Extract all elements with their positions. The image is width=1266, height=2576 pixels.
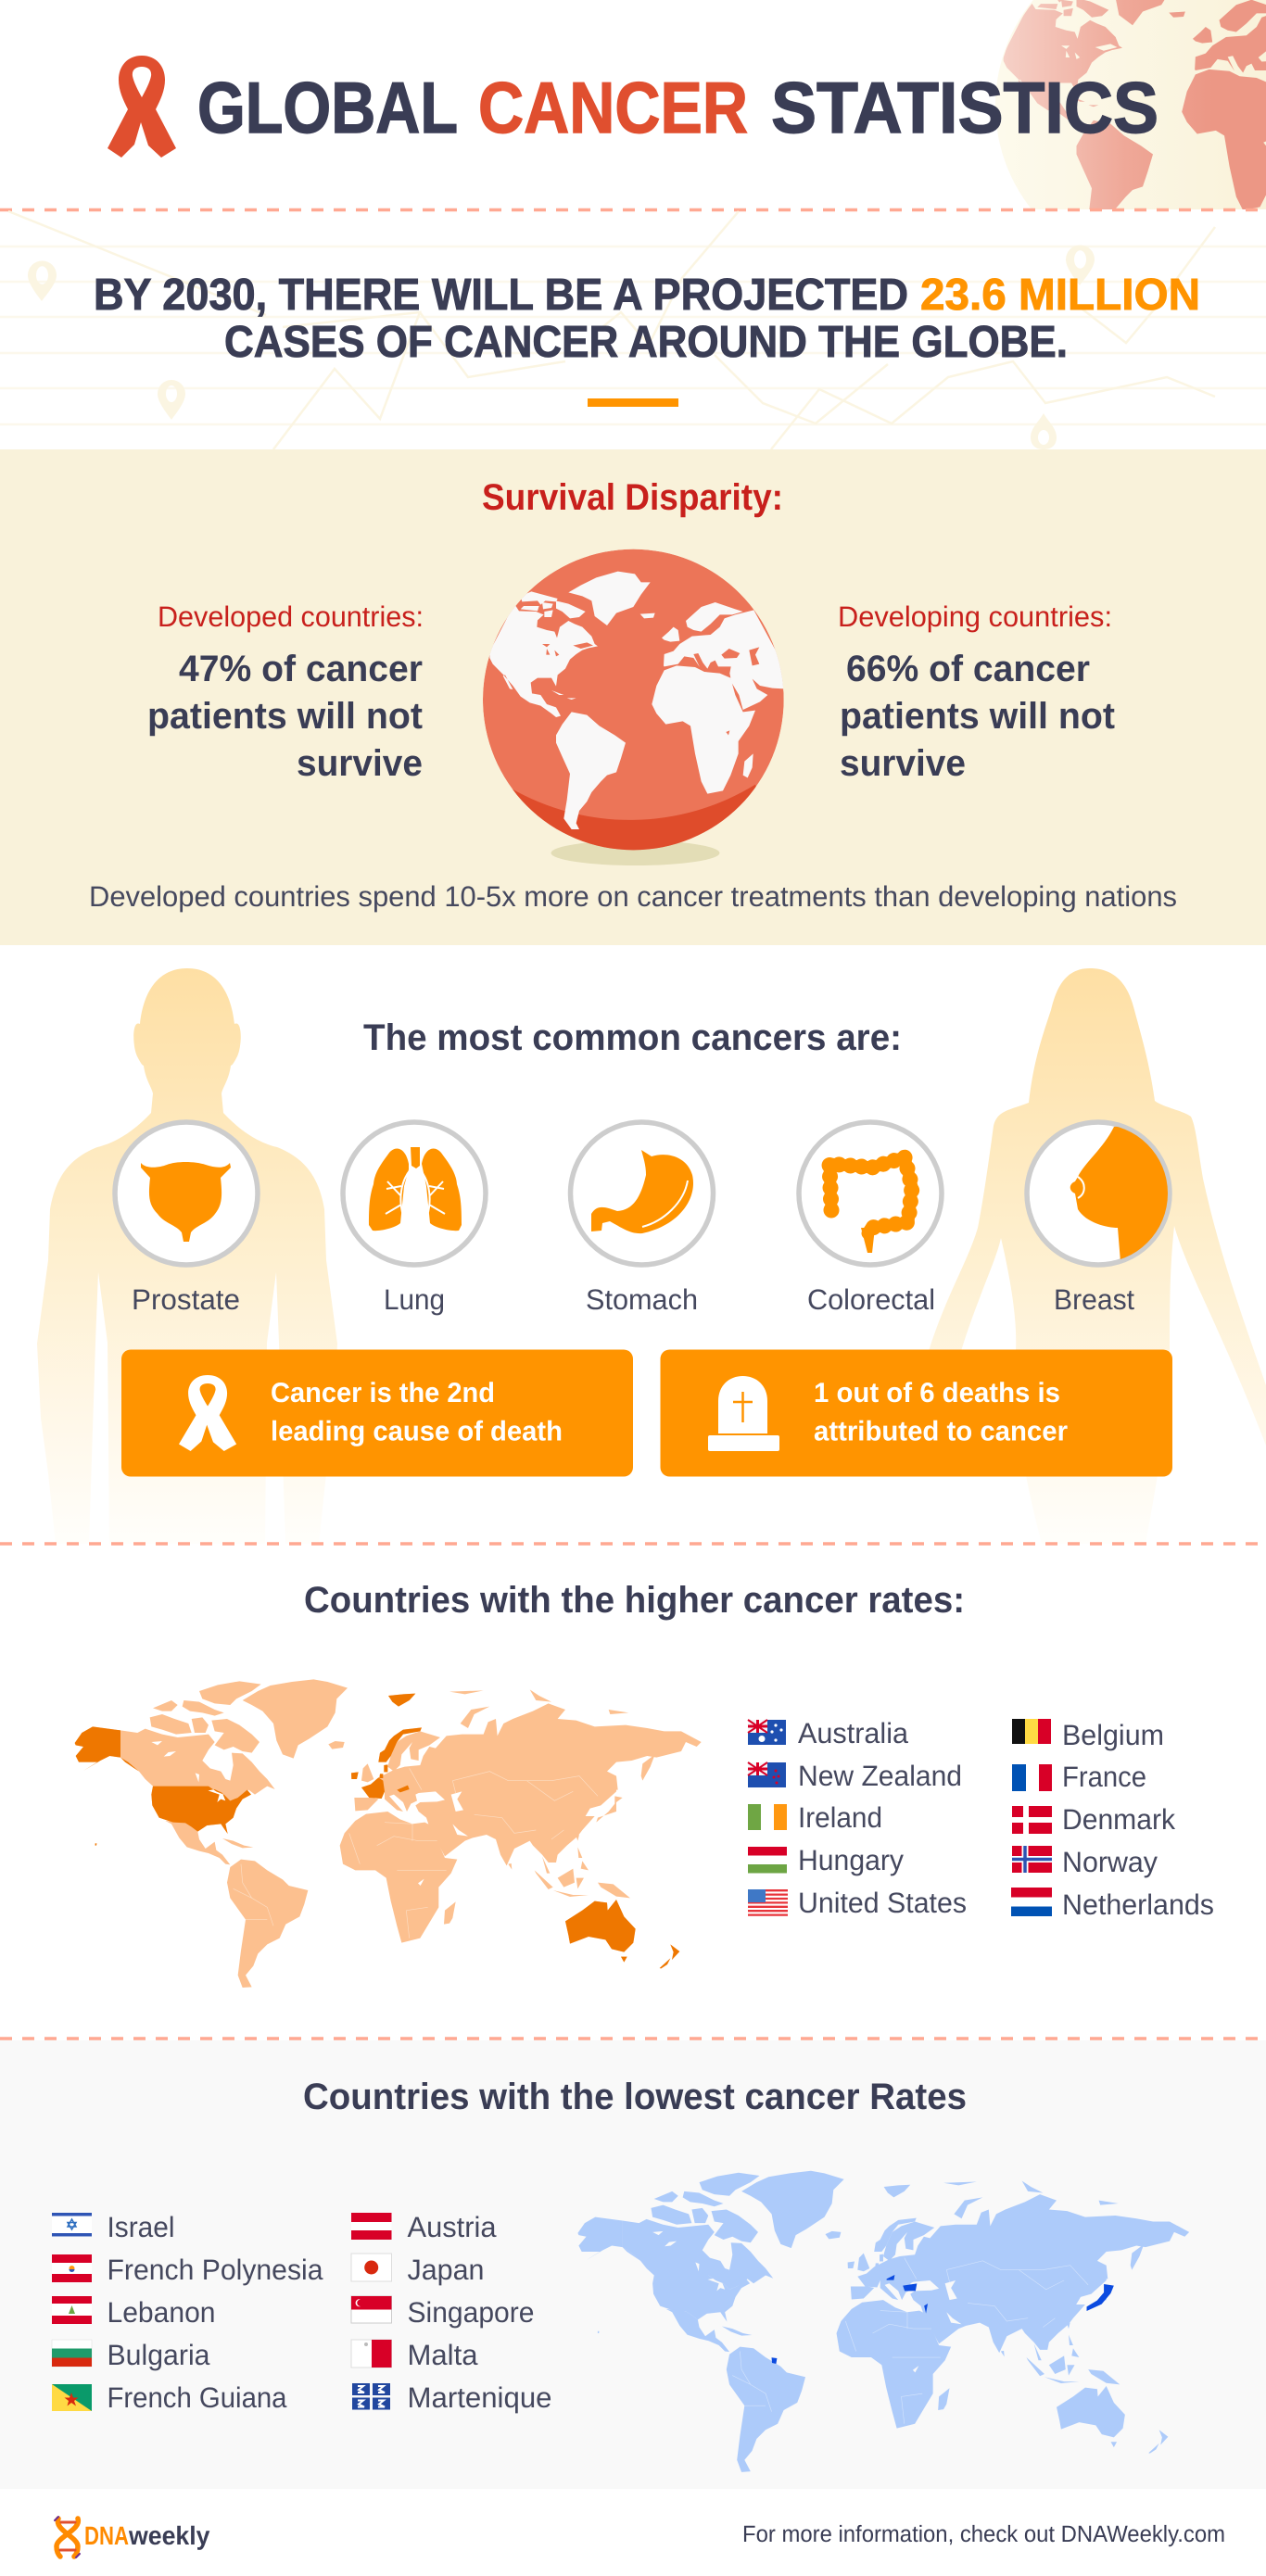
item: stomach [571,1122,714,1316]
flag: Hungary [748,1847,787,1874]
flag: French Guiana [52,2384,92,2411]
item: stomach: Stomach [586,1283,698,1316]
panel: survival disparity [0,449,1266,945]
title [197,67,1158,148]
logo: DNAweekly [55,2517,210,2557]
flag: Japan [351,2254,391,2281]
flag: Austria [351,2213,391,2240]
panel: footer [55,2517,1225,2557]
map: lowest rate countries [577,2171,1189,2472]
heading: most common cancers: The most common cancers are: [363,1017,902,1058]
decorative globe top right [995,0,1266,209]
text block: developed countries: patients will not [147,696,423,737]
logo: DNAweekly: DNA [84,2521,129,2550]
text: spending note: Developed countries spend 10-5x more on cancer treatments than developing nations [89,880,1177,913]
flag: Israel [52,2213,92,2237]
flag: Netherlands [1011,1888,1052,1916]
callout: second leading cause: leading cause of death [271,1416,563,1447]
flag: Singapore [351,2296,391,2323]
silhouette: woman [922,968,1266,1544]
flag: Norway [1012,1846,1052,1873]
flag: Bulgaria [52,2340,92,2367]
legend: low rate countries: Israel [108,2211,174,2243]
callout: second leading cause: Cancer is the 2nd [271,1378,495,1408]
legend: high rate countries [748,1717,1214,1921]
text block: developing countries [838,600,1115,784]
legend: high rate countries: Hungary [798,1844,904,1876]
flag: France [1012,1764,1052,1791]
item: breast: Breast [1054,1283,1134,1316]
flag: Ireland [748,1804,787,1830]
text: source note: For more information, check out DNAWeekly.com [742,2521,1225,2547]
panel: higher cancer rates [75,1580,1214,1988]
text block: developing countries: patients will not [840,696,1115,737]
text block: developed countries: Developed countries: [158,600,424,633]
panel: header [108,0,1266,272]
headline [94,271,1200,367]
panel: most common cancers [37,968,1266,1544]
silhouette: man [37,968,337,1544]
text block: developed countries: 47% of cancer [179,649,423,689]
icon: tombstone [708,1376,779,1451]
text block: developed countries [147,600,424,784]
text block: developing countries: survive [840,743,966,784]
callout: one in six deaths [660,1349,1172,1477]
legend: high rate countries: Ireland [798,1801,882,1834]
icon: white ribbon [179,1375,236,1451]
flag: Denmark [1012,1806,1052,1834]
legend: low rate countries: French Guiana [108,2381,287,2414]
logo: DNAweekly: weekly [128,2521,210,2550]
callout: one in six deaths: attributed to cancer [814,1416,1068,1447]
icon: awareness ribbon [108,56,176,158]
text block: developing countries: 66% of cancer [846,649,1090,689]
callout: second leading cause [121,1349,633,1477]
flag: Australia [748,1720,786,1745]
heading: lowest rates: Countries with the lowest cancer Rates [303,2077,967,2117]
heading: higher rates: Countries with the higher cancer rates: [304,1580,965,1621]
title: STATISTICS [771,67,1158,148]
headline: BY 2030, THERE WILL BE A PROJECTED [94,271,908,320]
text block: developed countries: survive [297,743,423,784]
title: GLOBAL [197,67,458,148]
legend: high rate countries: Australia [798,1717,909,1749]
item: breast [1027,1121,1182,1316]
map: highest rate countries [75,1679,702,1988]
flag: United States [748,1889,788,1916]
item: prostate [115,1122,258,1316]
item: prostate: Prostate [132,1283,240,1316]
legend: low rate countries: French Polynesia [108,2254,323,2286]
flag: Malta [351,2340,391,2368]
legend: low rate countries: Austria [408,2211,497,2243]
panel: lowest cancer rates [0,2040,1266,2489]
legend: low rate countries: Bulgaria [108,2339,210,2371]
legend: high rate countries: France [1062,1761,1146,1793]
legend: high rate countries: Netherlands [1062,1888,1214,1921]
callout: one in six deaths: 1 out of 6 deaths is [814,1378,1060,1408]
legend: high rate countries: United States [798,1887,967,1919]
item: lung: Lung [384,1283,445,1316]
title: CANCER [478,67,748,148]
legend: low rate countries [52,2211,552,2414]
illustration: globe [475,549,791,878]
legend: high rate countries: Belgium [1062,1719,1164,1751]
background chart lines [0,211,1266,449]
heading: survival disparity: Survival Disparity: [482,477,783,518]
flag: Lebanon [52,2296,92,2324]
legend: high rate countries: Norway [1062,1846,1158,1878]
legend: low rate countries: Japan [408,2254,484,2286]
accent bar [588,398,678,407]
item: lung [343,1122,486,1316]
legend: low rate countries: Lebanon [108,2296,215,2329]
item: colorectal [799,1122,942,1316]
text block: developing countries: Developing countries: [838,600,1112,633]
legend: high rate countries: Denmark [1062,1803,1175,1836]
flag: Martinique [352,2383,390,2409]
flag: New Zealand [748,1762,786,1787]
item: colorectal: Colorectal [807,1283,935,1316]
flag: French Polynesia [52,2254,92,2282]
flag: Belgium [1012,1719,1051,1744]
legend: high rate countries: New Zealand [798,1760,962,1792]
panel: projection banner [0,211,1266,449]
headline: 23.6 MILLION [920,271,1200,320]
legend: low rate countries: Singapore [408,2296,534,2329]
icon: DNA helix [55,2517,80,2557]
headline: CASES OF CANCER AROUND THE GLOBE. [224,318,1068,367]
legend: low rate countries: Martenique [408,2381,552,2414]
legend: low rate countries: Malta [408,2339,478,2371]
